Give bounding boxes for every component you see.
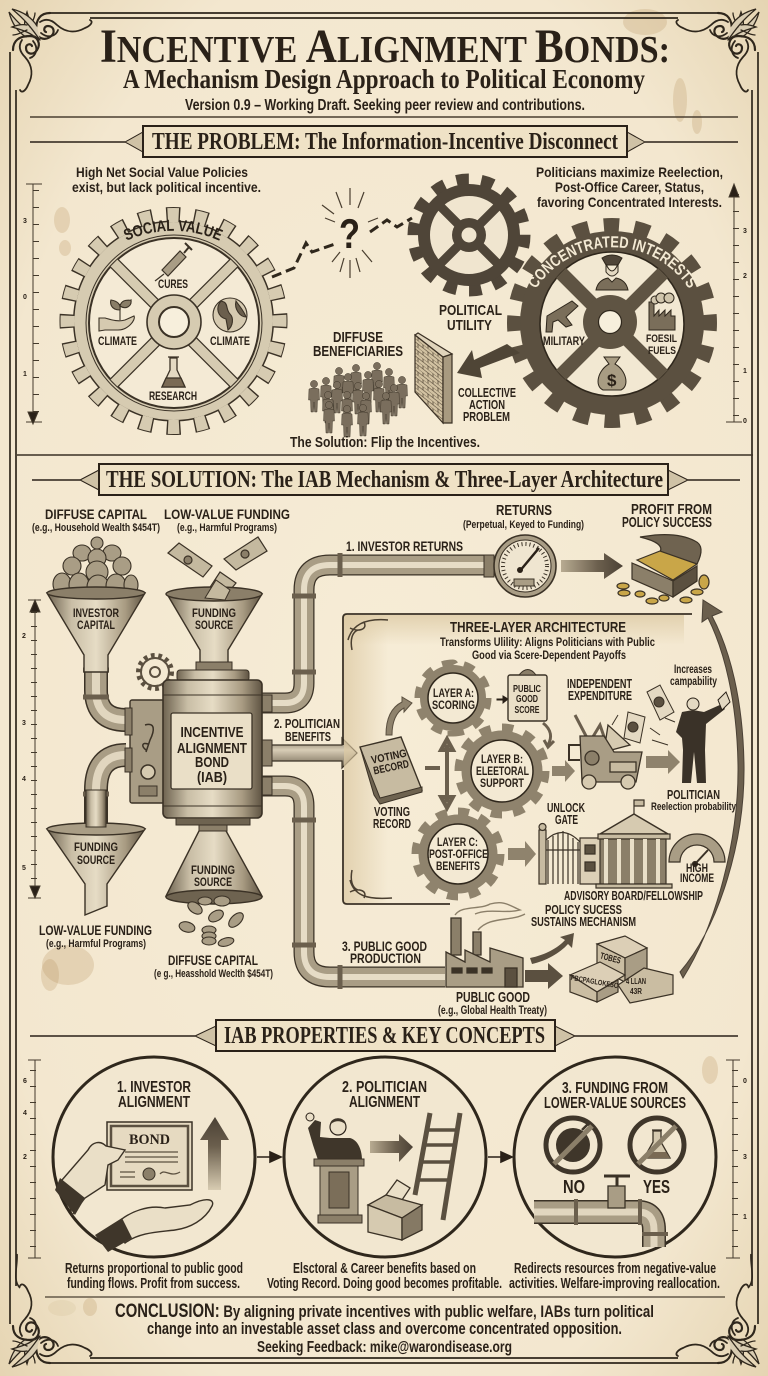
ruler: problem right: 2	[743, 273, 747, 280]
icon: globe	[213, 298, 247, 332]
icon: public good score clipboard: GOOD	[516, 694, 538, 705]
icon: public good score clipboard: SCORE	[514, 705, 540, 716]
gear: layer c	[418, 814, 498, 894]
conclusion: change into an investable asset class and overcome concentrated opposition.	[147, 1319, 622, 1338]
label: voting record	[373, 805, 411, 831]
ruler: bottom left: 2	[23, 1154, 27, 1161]
label: diffuse beneficiaries	[313, 329, 403, 360]
gear: concentrated interests: MILITARY	[543, 334, 585, 348]
funnel: inverted with coins: SOURCE	[194, 875, 232, 889]
gear: layer b: LAYER B:	[481, 752, 523, 766]
panel: three-layer architecture	[343, 614, 692, 904]
heading: iab properties	[30, 1020, 738, 1051]
icon: public good score clipboard: PUBLIC	[513, 684, 541, 695]
icon: hand with plant	[99, 300, 134, 331]
icon: voting record book: VOTING	[370, 747, 408, 767]
icon: cartons of public good: 43R	[630, 987, 642, 996]
arrow: factory up to mechanism	[530, 933, 574, 964]
icon: arrow up	[200, 1117, 229, 1190]
ruler: bottom right: 3	[743, 1154, 747, 1161]
label: public good production	[342, 938, 427, 966]
heading: the problem: THE PROBLEM: The Information-Incentive Disconnect	[152, 129, 618, 155]
arrow: panel 1 to 2	[257, 1152, 281, 1162]
labels: diffuse capital bottom	[154, 952, 273, 980]
panel: politician alignment	[284, 1057, 486, 1257]
label: profit from policy success: PROFIT FROM	[631, 501, 712, 518]
label: voting record: VOTING	[374, 805, 410, 819]
panel: funding from lower-value sources	[514, 1057, 716, 1257]
icon: politician	[676, 692, 730, 783]
label: voting record: RECORD	[373, 817, 411, 831]
label: politician benefits: BENEFITS	[285, 729, 331, 744]
arrow: score to cart	[543, 723, 554, 747]
ruler: problem left: 3	[23, 218, 27, 225]
label: political utility	[439, 302, 502, 334]
icon: cartons of public good: 4 LLAN	[626, 977, 646, 986]
gear: layer c: POST-OFFICE	[429, 847, 488, 861]
funnel: funding source lower left: FUNDING	[74, 840, 118, 854]
label: no: NO	[563, 1177, 585, 1197]
panel: funding from lower-value sources: LOWER-VALUE SOURCES	[544, 1095, 686, 1112]
label: returns: (Perpetual, Keyed to Funding)	[463, 519, 584, 531]
icon: treasure chest	[617, 535, 709, 604]
version note: Version 0.9 – Working Draft. Seeking peer review and contributions.	[185, 97, 585, 114]
panel: investor alignment	[53, 1057, 255, 1257]
icon: lower hand	[115, 1200, 213, 1243]
dashed connection with question mark: ?	[339, 210, 360, 257]
gear: social value: CURES	[158, 279, 188, 291]
labels: low-value funding bottom: (e.g., Harmful Programs)	[46, 938, 146, 950]
arrow: layer c to gate	[508, 841, 536, 867]
funnel: funding source with bills: FUNDING	[192, 606, 236, 620]
labels: low-value funding bottom: LOW-VALUE FUNDING	[39, 922, 152, 938]
ruler: bottom right: 1	[743, 1214, 747, 1221]
gear: social value: RESEARCH	[149, 391, 197, 403]
arrow: factory to boxes	[525, 963, 563, 989]
gear: layer b	[461, 730, 543, 812]
funnel: funding source with bills	[166, 537, 267, 668]
arrow: a to clipboard	[497, 696, 508, 703]
gear: social value: CLIMATE	[210, 336, 250, 348]
label: diffuse beneficiaries: BENEFICIARIES	[313, 343, 403, 360]
conclusion: Seeking Feedback: mike@warondisease.org	[257, 1339, 512, 1356]
dashed connection with question mark	[272, 188, 412, 278]
label: public good	[438, 989, 547, 1017]
caption: investor alignment: funding flows. Profit from success.	[67, 1276, 240, 1292]
labels: diffuse capital top	[32, 506, 160, 534]
icon: money bag	[598, 357, 626, 390]
labels: diffuse capital top: DIFFUSE CAPITAL	[45, 506, 147, 522]
icon: gauge	[484, 535, 556, 597]
funnel: funding source with bills: SOURCE	[195, 618, 233, 632]
icon: public good score clipboard	[508, 670, 547, 721]
gear: concentrated interests: FOESIL	[646, 333, 677, 345]
label: high income: INCOME	[680, 871, 714, 885]
icon: ladder	[415, 1113, 460, 1220]
labels: low-value funding bottom	[39, 922, 152, 950]
gear: layer b: ELEETORAL	[476, 764, 529, 778]
caption: investor alignment: Returns proportional to public good	[65, 1261, 243, 1277]
label: yes: YES	[643, 1177, 670, 1197]
text: flip the incentives: The Solution: Flip the Incentives.	[290, 435, 480, 451]
ruler: problem right: 1	[743, 368, 747, 375]
label: high income: HIGH	[686, 861, 708, 875]
gear: layer c: BENEFITS	[436, 859, 480, 873]
label: investor returns: 1. INVESTOR RETURNS	[346, 538, 463, 554]
label: returns	[463, 502, 584, 531]
gear: political utility	[415, 181, 523, 289]
gear: concentrated interests	[507, 218, 717, 428]
machine: control box and gear	[125, 656, 171, 803]
funnel: funding source lower left: SOURCE	[77, 853, 115, 867]
ruler: problem left	[23, 184, 42, 424]
conclusion: CONCLUSION: By aligning private incentives with public welfare, IABs turn political	[115, 1301, 654, 1322]
arrow: to wall	[457, 344, 520, 378]
ruler: solution left: 3	[22, 720, 26, 727]
icon: bond certificate	[107, 1122, 192, 1190]
icon: officer	[596, 255, 628, 290]
machine: incentive alignment bond tank: BOND	[195, 754, 229, 771]
arrow: gauge to chest	[561, 553, 623, 579]
ruler: solution left: 5	[22, 865, 26, 872]
label: politician benefits	[274, 716, 340, 744]
heading: the problem	[30, 126, 738, 157]
funnel: inverted with coins: FUNDING	[191, 863, 235, 877]
ruler: bottom left: 4	[23, 1110, 27, 1117]
text: high net social value: High Net Social Value Policies	[76, 164, 248, 180]
icon: cartons of public good	[570, 936, 673, 1003]
text: politicians maximize: Post-Office Career, Status,	[555, 179, 704, 195]
text: high net social value	[72, 164, 261, 195]
text: politicians maximize	[536, 164, 723, 210]
icon: money bag: $	[607, 371, 617, 390]
text: high net social value: exist, but lack political incentive.	[72, 179, 261, 195]
label: profit from policy success: POLICY SUCCESS	[622, 514, 712, 531]
icon: voting record book: BECORD	[372, 758, 410, 777]
icon: brick wall	[415, 333, 452, 423]
pipes: left and right plumbing	[83, 553, 490, 989]
funnel: investor capital with bags	[47, 537, 145, 672]
ruler: problem right	[726, 184, 747, 425]
label: independent expenditure: INDEPENDENT	[567, 676, 632, 691]
gear: layer b: SUPPORT	[480, 776, 525, 790]
panel: three-layer architecture: Good via Scere-Dependent Payoffs	[472, 648, 626, 662]
caption: politician alignment: Elsctoral & Career benefits based on	[293, 1261, 476, 1277]
machine: incentive alignment bond tank: (IAB)	[197, 769, 227, 786]
label: politician	[651, 787, 737, 813]
label: political utility: POLITICAL	[439, 302, 502, 319]
labels: diffuse capital bottom: (e g., Heasshold Weclth $454T)	[154, 968, 273, 980]
icon: high income dial	[669, 834, 725, 866]
text: politicians maximize: favoring Concentrated Interests.	[537, 194, 722, 210]
panel: investor alignment: ALIGNMENT	[118, 1094, 190, 1111]
ruler: solution left	[22, 600, 41, 898]
ruler: problem right: 0	[743, 418, 747, 425]
labels: diffuse capital top: (e.g., Household Wealth $454T)	[32, 522, 160, 534]
label: public good: (e.g., Global Health Treaty)	[438, 1005, 547, 1017]
icon: no bomb	[546, 1118, 600, 1172]
ruler: bottom right	[726, 1060, 747, 1258]
labels: low-value funding top: LOW-VALUE FUNDING	[164, 506, 290, 522]
gear: layer a	[420, 665, 486, 731]
caption: funding from lower-value sources	[509, 1261, 720, 1292]
funnel: inverted with coins	[166, 829, 262, 948]
icon: voting record book	[360, 737, 422, 804]
label: political utility: UTILITY	[447, 317, 492, 334]
label: politician benefits: 2. POLITICIAN	[274, 716, 340, 731]
icon: expenditure cart	[569, 715, 642, 789]
funnel: investor capital with bags: INVESTOR	[73, 606, 119, 620]
icon: syringe	[155, 243, 192, 281]
icon: flying leaflets	[612, 685, 675, 745]
label: public good: PUBLIC GOOD	[456, 989, 530, 1006]
icon: cartons of public good: PBCPAGLOKESC	[570, 973, 619, 990]
caption: politician alignment	[267, 1261, 502, 1292]
icon: politician at podium	[306, 1113, 364, 1223]
labels: low-value funding top	[164, 506, 290, 534]
machine: incentive alignment bond tank: INCENTIVE	[180, 724, 244, 741]
gear: layer a: LAYER A:	[433, 688, 474, 700]
text: politicians maximize: Politicians maximize Reelection,	[536, 164, 723, 180]
label: unlock gate: UNLOCK	[547, 800, 585, 815]
label: increases campability: campability	[670, 676, 717, 688]
label: independent expenditure	[567, 676, 632, 703]
gear: concentrated interests: FUELS	[648, 345, 676, 357]
label: high income	[680, 861, 714, 885]
panel: funding from lower-value sources: 3. FUNDING FROM	[562, 1080, 668, 1097]
label: unlock gate	[547, 800, 585, 827]
labels: diffuse capital bottom: DIFFUSE CAPITAL	[168, 952, 258, 968]
gear: social value: CLIMATE	[98, 336, 137, 348]
icon: arrow to ladder	[370, 1134, 413, 1162]
label: advisory board: ADVISORY BOARD/FELLOWSHIP	[564, 889, 703, 903]
label: returns: RETURNS	[496, 502, 552, 519]
label: public good production: 3. PUBLIC GOOD	[342, 938, 427, 954]
machine: incentive alignment bond tank: ALIGNMENT	[177, 740, 247, 757]
label: collective action problem: COLLECTIVE	[458, 385, 516, 400]
heading: THREE-LAYER ARCHITECTURE	[450, 619, 626, 636]
arrow: politician benefits	[262, 738, 357, 768]
label: policy success sustains mechanism: SUSTAINS MECHANISM	[531, 914, 636, 929]
icon: upper hand	[62, 1143, 125, 1215]
label: policy success sustains mechanism: POLICY SUCESS	[545, 902, 622, 917]
machine: incentive alignment bond tank	[163, 662, 272, 831]
panel: politician alignment: ALIGNMENT	[349, 1094, 420, 1111]
icon: bond certificate: BOND	[129, 1132, 170, 1148]
arrow: cart to politician	[646, 750, 680, 774]
ruler: problem right: 3	[743, 228, 747, 235]
arrow: book to layer a	[386, 697, 412, 735]
icon: factory	[649, 293, 675, 330]
arrow: panel 2 to 3	[488, 1152, 512, 1162]
label: collective action problem: ACTION	[469, 397, 505, 412]
ruler: bottom right: 0	[743, 1078, 747, 1085]
heading: iab properties: IAB PROPERTIES & KEY CONCEPTS	[224, 1023, 545, 1049]
ruler: solution left: 4	[22, 776, 26, 783]
label: concentrated interests: CONCENTRATED INTERESTS	[529, 236, 695, 288]
label: unlock gate: GATE	[555, 812, 578, 827]
gear: layer c: LAYER C:	[437, 835, 478, 849]
label: independent expenditure: EXPENDITURE	[568, 688, 632, 703]
icon: cartons of public good: TOBES	[599, 951, 622, 966]
caption: investor alignment	[65, 1261, 243, 1292]
panel: investor alignment: 1. INVESTOR	[117, 1079, 191, 1096]
ruler: solution left: 2	[22, 633, 26, 640]
label: increases campability: Increases	[674, 664, 712, 676]
label: social value: SOCIAL VALUE	[124, 220, 224, 241]
label: politician: POLITICIAN	[667, 787, 720, 802]
subheading: Transforms Ulility: Aligns Politicians with Public	[440, 635, 655, 649]
label: increases campability	[670, 664, 717, 688]
icon: ballot box	[368, 1180, 422, 1240]
icon: no flask	[630, 1118, 684, 1172]
label: politician: Reelection probability	[651, 801, 737, 813]
subtitle: A Mechanism Design Approach to Political Economy	[123, 64, 645, 94]
icon: factory	[446, 903, 525, 987]
label: collective action problem: PROBLEM	[463, 409, 510, 424]
arrow: book to layers b and c	[425, 739, 453, 808]
arrow: big feedback curve	[680, 600, 744, 978]
conclusion	[115, 1301, 654, 1356]
label: policy success sustains mechanism	[531, 902, 636, 929]
icon: crowd of people	[308, 362, 408, 437]
arrow: layer b to cart	[552, 760, 575, 782]
icon: valve pipe	[534, 1176, 668, 1247]
gear: social value	[60, 207, 288, 435]
ruler: bottom left	[23, 1060, 41, 1258]
label plate	[171, 713, 252, 789]
funnel: investor capital with bags: CAPITAL	[77, 618, 115, 632]
labels: low-value funding top: (e.g., Harmful Programs)	[177, 522, 277, 534]
label: collective action problem	[458, 385, 516, 424]
title: INCENTIVE ALIGNMENT BONDS:	[100, 20, 670, 73]
gear: layer a: SCORING	[432, 700, 475, 712]
ruler: problem left: 1	[23, 371, 27, 378]
icon: gate and institution	[539, 800, 672, 888]
ruler: problem left: 0	[23, 294, 27, 301]
label: diffuse beneficiaries: DIFFUSE	[333, 329, 383, 346]
label: profit from policy success	[622, 501, 712, 531]
ruler: bottom left: 6	[23, 1078, 27, 1085]
panel: politician alignment: 2. POLITICIAN	[342, 1079, 427, 1096]
label: public good production: PRODUCTION	[350, 950, 421, 966]
caption: politician alignment: Voting Record. Doing good becomes profitable.	[267, 1276, 502, 1292]
icon: rifle	[546, 301, 578, 332]
icon: flask	[162, 357, 185, 387]
funnel: funding source lower left	[47, 790, 145, 915]
